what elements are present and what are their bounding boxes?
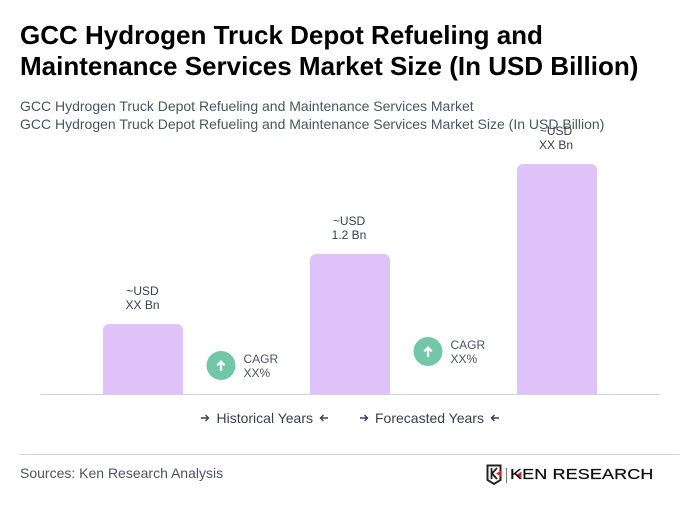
bar 1 [103, 324, 183, 394]
title: GCC Hydrogen Truck Depot Refueling and [20, 20, 543, 50]
footer divider [20, 454, 680, 455]
cagr text [243, 352, 278, 380]
axis line [40, 394, 660, 395]
icon: right arrow [360, 414, 368, 422]
cagr text: CAGR [243, 352, 278, 366]
bar 2 [310, 254, 390, 394]
bar 3 [517, 164, 597, 394]
bar 2 label: ~USD [333, 214, 365, 228]
bar 3 label [539, 124, 573, 152]
subtitle [20, 98, 604, 132]
bar 3 label: XX Bn [539, 138, 573, 152]
cagr text: XX% [243, 366, 270, 380]
cagr text: XX% [450, 352, 477, 366]
cagr badge 1 [206, 351, 278, 380]
cagr text [450, 338, 485, 366]
bar 2 label [332, 214, 366, 242]
subtitle: GCC Hydrogen Truck Depot Refueling and Maintenance Services Market Size (In USD Billion) [20, 116, 604, 132]
bar 2 label: 1.2 Bn [332, 228, 366, 242]
bar 1 label: ~USD [126, 284, 159, 298]
icon: left arrow [320, 414, 328, 422]
cagr badge 2 [414, 337, 485, 366]
logo text: KEN RESEARCH [510, 466, 653, 483]
icon: right arrow [201, 414, 210, 422]
icon: left arrow [490, 414, 499, 422]
logo: ken research [486, 464, 653, 486]
legend: historical years: Historical Years [216, 410, 313, 426]
icon: shield [486, 464, 522, 486]
subtitle: GCC Hydrogen Truck Depot Refueling and Maintenance Services Market [20, 98, 474, 114]
cagr text: CAGR [450, 338, 485, 352]
bar 3 label: ~USD [540, 124, 572, 138]
icon: up arrow [206, 351, 236, 380]
sources: Sources: Ken Research Analysis [20, 465, 223, 481]
title: Maintenance Services Market Size (In USD Billion) [20, 51, 638, 81]
icon: up arrow [414, 337, 442, 366]
title [20, 20, 638, 81]
bar 1 label: XX Bn [125, 298, 160, 312]
bar 1 label [125, 284, 160, 312]
legend: forecasted years: Forecasted Years [375, 410, 484, 426]
